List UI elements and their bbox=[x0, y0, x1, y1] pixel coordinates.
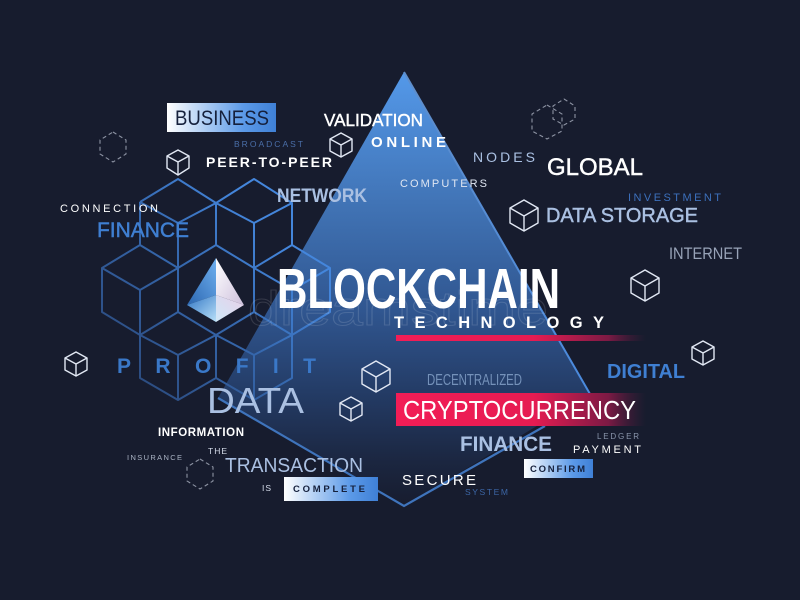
label: finance blue: FINANCE bbox=[97, 219, 189, 242]
label: nodes: NODES bbox=[473, 149, 535, 165]
watermark: dreamstime bbox=[248, 283, 548, 336]
label: data: DATA bbox=[207, 380, 304, 421]
label: investment: INVESTMENT bbox=[628, 192, 721, 204]
icon: dashed hexagons top right bbox=[532, 99, 575, 139]
red accent bar bbox=[396, 335, 646, 341]
label: peer-to-peer: PEER-TO-PEER bbox=[206, 154, 332, 170]
BUSINESS chip: BUSINESS bbox=[175, 107, 269, 130]
label: internet: INTERNET bbox=[669, 245, 742, 263]
icon: cube 8 bbox=[340, 397, 362, 421]
large gradient triangle bbox=[218, 72, 590, 506]
label: data storage: DATA STORAGE bbox=[546, 204, 698, 227]
label: broadcast: BROADCAST bbox=[234, 139, 303, 149]
label: insurance: INSURANCE bbox=[127, 453, 182, 462]
label: digital: DIGITAL bbox=[607, 361, 685, 383]
icon: dashed hexagon left bbox=[100, 132, 126, 162]
title: blockchain: BLOCKCHAIN bbox=[277, 257, 560, 321]
label: payment: PAYMENT bbox=[573, 444, 641, 456]
label: global: GLOBAL bbox=[547, 154, 643, 181]
label: system: SYSTEM bbox=[465, 487, 508, 497]
icon: dashed hexagon bottom bbox=[187, 459, 213, 489]
label: profit: PROFIT bbox=[117, 355, 316, 378]
icon: cube 5 bbox=[692, 341, 714, 365]
label: connection: CONNECTION bbox=[60, 203, 158, 215]
label: is: IS bbox=[262, 483, 271, 493]
COMPLETE chip: COMPLETE bbox=[293, 484, 365, 495]
CONFIRM chip: CONFIRM bbox=[530, 464, 585, 475]
hexagonal cube lattice bbox=[102, 179, 330, 400]
icon: cube 6 bbox=[65, 352, 87, 376]
label: finance light: FINANCE bbox=[460, 433, 552, 456]
label: ledger: LEDGER bbox=[597, 432, 639, 441]
label: network: NETWORK bbox=[277, 186, 367, 207]
CONFIRM chip bbox=[524, 459, 593, 478]
label: computers: COMPUTERS bbox=[400, 178, 487, 190]
CRYPTOCURRENCY banner: CRYPTOCURRENCY bbox=[403, 395, 636, 425]
label: transaction: TRANSACTION bbox=[225, 455, 363, 477]
subtitle: technology: TECHNOLOGY bbox=[394, 314, 604, 332]
label: the: THE bbox=[208, 446, 227, 456]
label: decentralized: DECENTRALIZED bbox=[427, 372, 522, 389]
COMPLETE chip bbox=[284, 477, 378, 501]
icon: cube 1 bbox=[167, 150, 189, 175]
icon: cube 2 bbox=[330, 133, 352, 157]
icon: cube 7 bbox=[362, 361, 390, 392]
icon: cube 3 bbox=[510, 200, 538, 231]
icon: crystal pyramid bbox=[187, 258, 244, 322]
label: secure: SECURE bbox=[402, 472, 476, 489]
label: information: INFORMATION bbox=[158, 427, 244, 439]
icon: cube 4 bbox=[631, 270, 659, 301]
label: validation: VALIDATION bbox=[324, 110, 423, 130]
label: online: ONLINE bbox=[371, 134, 446, 151]
